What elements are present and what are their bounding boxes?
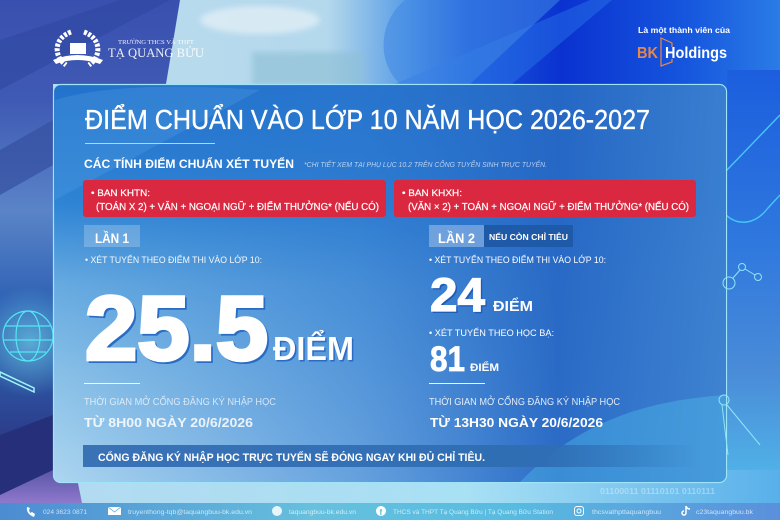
opening time label: THỜI GIAN MỞ CỔNG ĐĂNG KÝ NHẬP HỌC bbox=[429, 395, 620, 408]
criterion label: • XÉT TUYỂN THEO ĐIỂM THI VÀO LỚP 10: bbox=[85, 254, 262, 265]
footnote: *CHI TIẾT XEM TẠI PHỤ LỤC 10.2 TRÊN CỔNG TUYỂN SINH TRỰC TUYẾN. bbox=[304, 160, 547, 169]
opening time label: THỜI GIAN MỞ CỔNG ĐĂNG KÝ NHẬP HỌC bbox=[84, 395, 276, 408]
panel: main card bbox=[54, 84, 726, 482]
criterion label: exam: • XÉT TUYỂN THEO ĐIỂM THI VÀO LỚP 10: bbox=[429, 254, 606, 265]
score 24 bbox=[430, 268, 533, 322]
BK Holdings member logo bbox=[637, 26, 731, 66]
score 24: 24 bbox=[430, 268, 485, 321]
BK wordmark: BK bbox=[637, 45, 658, 62]
formula box: Ban KHTN: • BAN KHTN: bbox=[91, 188, 150, 199]
opening time: TỪ 13H30 NGÀY 20/6/2026 bbox=[430, 415, 603, 430]
instagram handle: thcsvathpttaquangbuu bbox=[592, 509, 661, 516]
title: ĐIỂM CHUẨN VÀO LỚP 10 NĂM HỌC 2026-2027 bbox=[85, 104, 650, 135]
member caption: Là một thành viên của bbox=[638, 26, 731, 35]
Holdings wordmark: Holdings bbox=[665, 45, 727, 62]
icon: mail bbox=[108, 507, 121, 515]
school logo bbox=[53, 32, 204, 65]
score 24: 24 bbox=[432, 270, 486, 322]
badge: Lần 2 bbox=[429, 225, 573, 247]
score 25.5 bbox=[85, 278, 356, 382]
score 25.5: ĐIỂM bbox=[273, 330, 354, 367]
formula box: Ban KHTN bbox=[83, 180, 386, 217]
opening time: TỪ 8H00 NGÀY 20/6/2026 bbox=[84, 415, 253, 430]
badge: Lần 1: LẦN 1 bbox=[95, 231, 129, 246]
icon: laurel crest bbox=[53, 32, 103, 65]
right decorative shape bbox=[717, 115, 780, 222]
formula box: Ban KHXH bbox=[394, 180, 696, 217]
school name: TRƯỜNG THCS VÀ THPT bbox=[118, 38, 194, 46]
closing notice bar bbox=[83, 445, 697, 467]
formula box: Ban KHXH: (VĂN × 2) + TOÁN + NGOẠI NGỮ + ĐIỂM THƯỞNG* (NẾU CÓ) bbox=[408, 200, 689, 213]
closing notice bar: CỔNG ĐĂNG KÝ NHẬP HỌC TRỰC TUYẾN SẼ ĐÓNG NGAY KHI ĐỦ CHỈ TIÊU. bbox=[98, 451, 485, 464]
criterion label: transcript: • XÉT TUYỂN THEO HỌC BẠ: bbox=[429, 327, 554, 338]
icon: tiktok bbox=[682, 506, 690, 515]
phone number: 024 3623 0871 bbox=[43, 509, 87, 516]
icon: globe bbox=[0, 311, 53, 392]
column: round 2 bbox=[429, 225, 620, 430]
score 81: ĐIỂM bbox=[470, 361, 499, 374]
score 25.5: 25.5 bbox=[87, 280, 270, 382]
icon: facebook bbox=[376, 506, 386, 517]
subheading: CÁC TÍNH ĐIỂM CHUẨN XÉT TUYỂN bbox=[84, 156, 294, 171]
formula box: Ban KHTN: (TOÁN X 2) + VĂN + NGOẠI NGỮ + ĐIỂM THƯỞNG* (NẾU CÓ) bbox=[96, 200, 379, 213]
decorative icons: molecule and compass bbox=[719, 264, 762, 455]
binary text: 01100011 01110101 0110111 bbox=[600, 487, 716, 496]
score 24: ĐIỂM bbox=[493, 297, 533, 315]
school logo: TẠ QUANG BỬU bbox=[108, 46, 204, 60]
icon: phone bbox=[27, 507, 35, 517]
formula box: Ban KHXH: • BAN KHXH: bbox=[402, 188, 462, 199]
score 81 bbox=[430, 340, 499, 379]
score 25.5: ĐIỂM bbox=[274, 332, 356, 368]
icon: instagram bbox=[574, 506, 584, 516]
icon: web globe bbox=[272, 506, 282, 516]
facebook page: THCS và THPT Tạ Quang Bửu | Tạ Quang Bửu Station bbox=[393, 508, 553, 516]
email: truyenthong-tqb@taquangbuu-bk.edu.vn bbox=[128, 509, 252, 516]
badge: Lần 1 bbox=[84, 225, 140, 247]
footer contact bar bbox=[0, 503, 780, 520]
score 81: 81 bbox=[430, 340, 465, 379]
icon: facebook: f bbox=[380, 508, 382, 517]
column: round 1 bbox=[84, 225, 356, 430]
icon: door frame bbox=[661, 38, 672, 66]
website: taquangbuu-bk.edu.vn bbox=[289, 509, 356, 516]
badge: Lần 2: LẦN 2 bbox=[438, 231, 475, 246]
score 25.5: 25.5 bbox=[85, 278, 268, 380]
tiktok handle: c23taquangbuu.bk bbox=[696, 509, 754, 516]
badge: Lần 2: NẾU CÒN CHỈ TIÊU bbox=[489, 231, 568, 242]
